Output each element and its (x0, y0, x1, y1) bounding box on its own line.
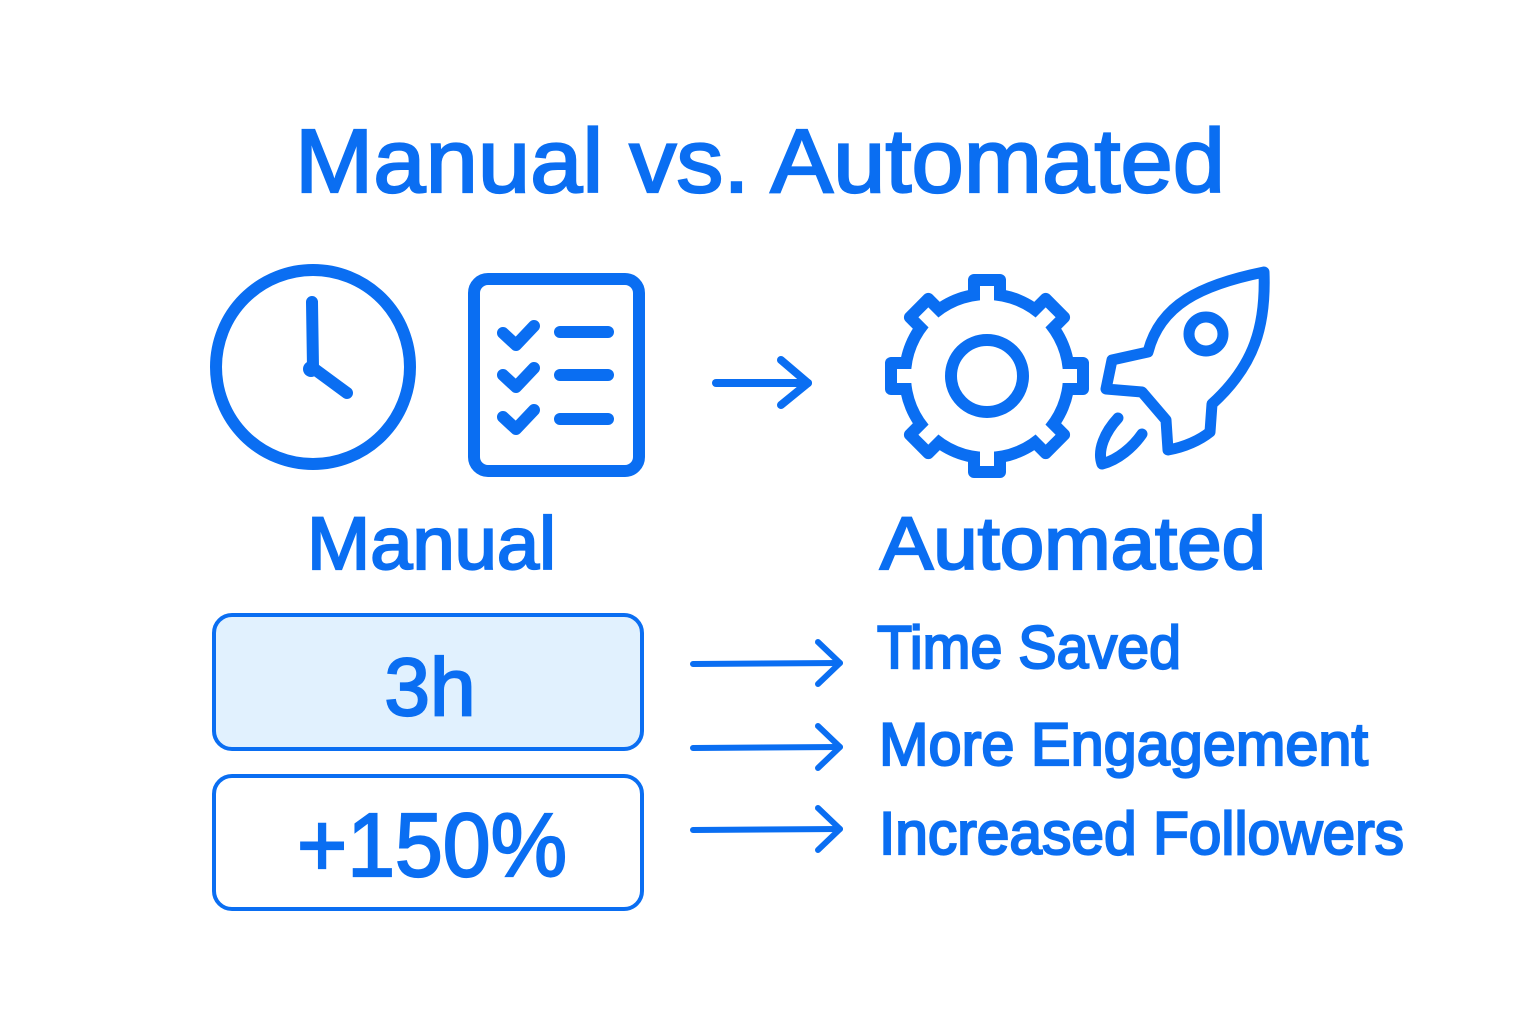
box: 3h: 3h (384, 642, 476, 733)
label: Manual: Manual (307, 502, 556, 585)
text: Increased Followers: Increased Followers (879, 800, 1404, 867)
box: +150%: +150% (297, 796, 567, 896)
title: Manual vs. Automated (295, 112, 1225, 212)
icon: rocket (1100, 272, 1264, 464)
label: Automated: Automated (880, 502, 1266, 585)
icon: clock (216, 270, 410, 464)
arrow: manual to automated (716, 360, 808, 405)
icon: gear (885, 274, 1089, 478)
arrow: more engagement (693, 726, 840, 768)
icon: checklist (474, 279, 639, 471)
box: 3h (214, 615, 642, 749)
arrow: increased followers (693, 808, 840, 850)
arrow: time saved (693, 642, 840, 684)
text: Time Saved: Time Saved (877, 614, 1181, 681)
box: +150% (214, 776, 642, 909)
text: More Engagement: More Engagement (879, 711, 1368, 778)
